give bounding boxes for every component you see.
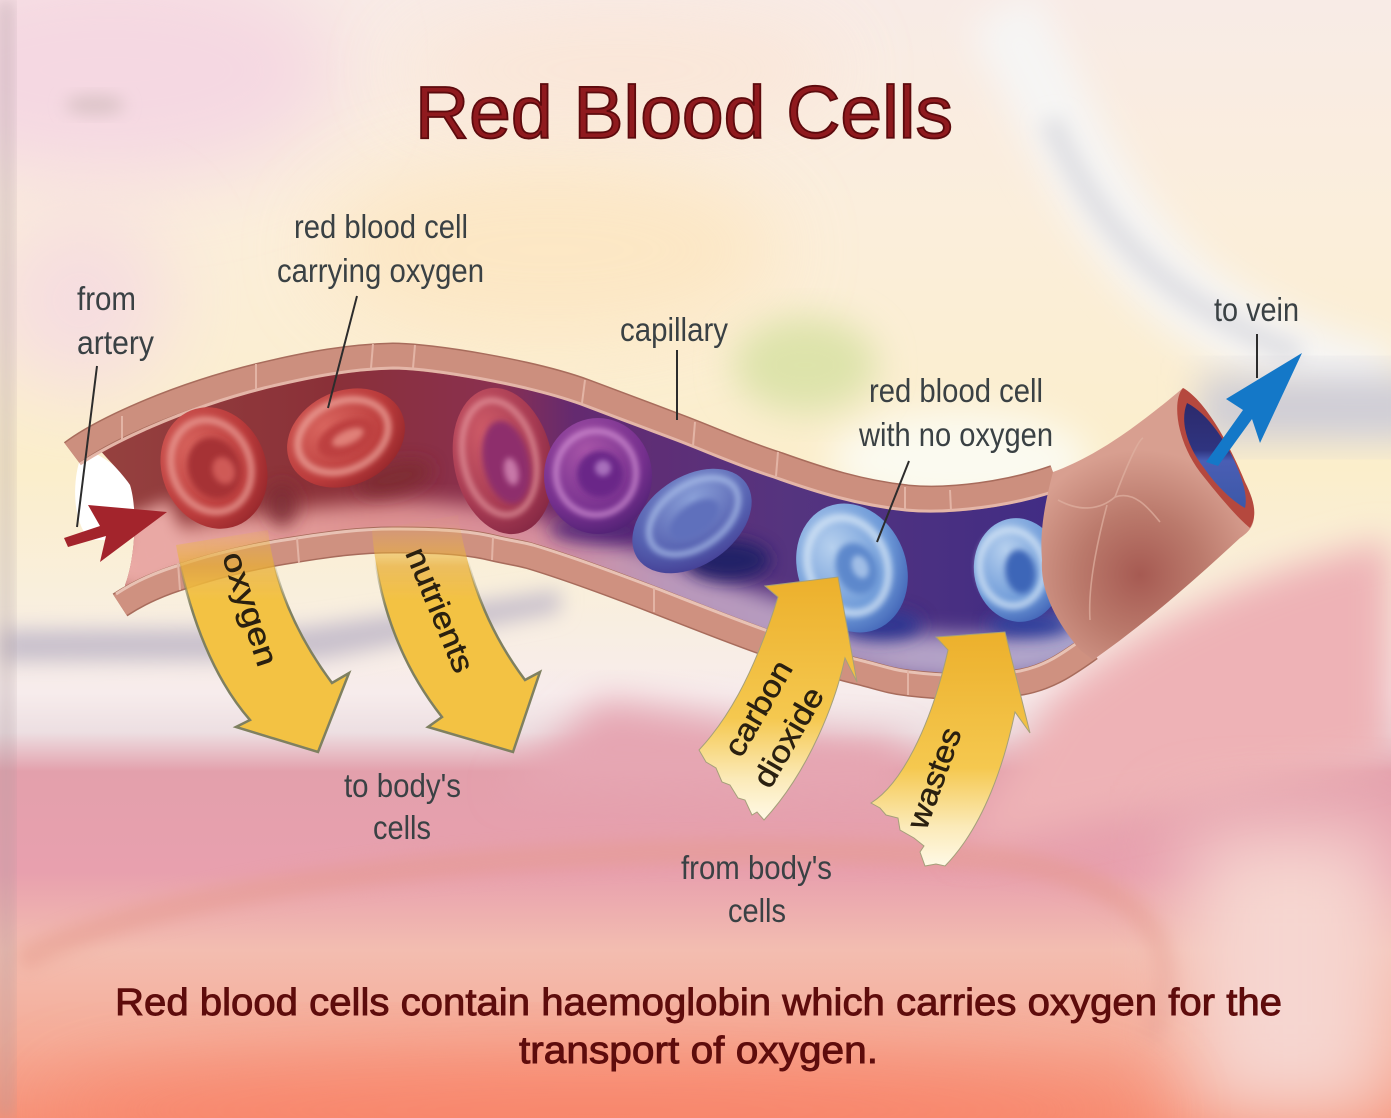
label: from artery: artery — [77, 324, 154, 361]
arrow: carbon dioxide: dioxide — [746, 681, 831, 794]
arrow: to vein — [1206, 353, 1302, 466]
label: from body's cells — [681, 849, 832, 929]
title: Red Blood Cells — [415, 71, 953, 154]
cell 2 — [271, 370, 421, 506]
label: to vein: to vein — [1214, 291, 1299, 328]
arrow: nutrients: nutrients — [399, 542, 481, 678]
upper capillary wall — [72, 344, 1058, 511]
pointer lines — [77, 296, 1257, 542]
arrow: nutrients — [372, 515, 540, 752]
cell 5 — [613, 447, 771, 595]
capillary — [72, 344, 1090, 695]
tube opening rim — [1177, 388, 1254, 528]
cell 6 — [777, 487, 927, 649]
caption: transport of oxygen. — [519, 1030, 878, 1072]
cell 4 — [544, 418, 652, 534]
label: to body's cells: cells — [373, 809, 431, 846]
arrow: wastes: wastes — [899, 723, 968, 834]
caption — [115, 982, 1282, 1072]
white vessel opening at left — [75, 448, 137, 540]
label: capillary: capillary — [620, 311, 728, 348]
label: red blood cell with no oxygen: with no oxygen — [858, 416, 1053, 453]
label: to body's cells: to body's — [344, 767, 461, 804]
cell shadows — [266, 454, 1072, 641]
label: red blood cell carrying oxygen: red blood cell — [294, 208, 468, 245]
label: from body's cells: cells — [728, 892, 786, 929]
vein end tube — [1041, 388, 1254, 660]
label: from body's cells: from body's — [681, 849, 832, 886]
arrow: oxygen: oxygen — [215, 547, 285, 670]
capillary lumen — [93, 356, 1090, 687]
label: red blood cell carrying oxygen — [277, 208, 484, 289]
cell 1 — [143, 391, 285, 545]
arrow: carbon dioxide: carbon — [717, 654, 800, 762]
label: red blood cell with no oxygen — [858, 372, 1053, 453]
arrow: carbon dioxide — [699, 577, 857, 820]
label: from artery: from — [77, 280, 136, 317]
cell 3 — [440, 378, 566, 544]
arrow: oxygen — [176, 530, 349, 752]
pale lower lumen — [110, 454, 1090, 659]
label: red blood cell carrying oxygen: carrying oxygen — [277, 252, 484, 289]
caption: Red blood cells contain haemoglobin which carries oxygen for the — [115, 982, 1282, 1024]
label: red blood cell with no oxygen: red blood cell — [869, 372, 1043, 409]
arrow: wastes — [871, 632, 1030, 866]
cell 7 — [967, 512, 1069, 628]
lower capillary wall — [116, 529, 1090, 695]
red blood cells — [143, 370, 1069, 649]
arrow: from artery — [64, 505, 167, 562]
tube opening — [1184, 403, 1246, 508]
label: from artery — [77, 280, 154, 361]
label: to body's cells — [344, 767, 461, 846]
tube veins — [1058, 438, 1160, 620]
